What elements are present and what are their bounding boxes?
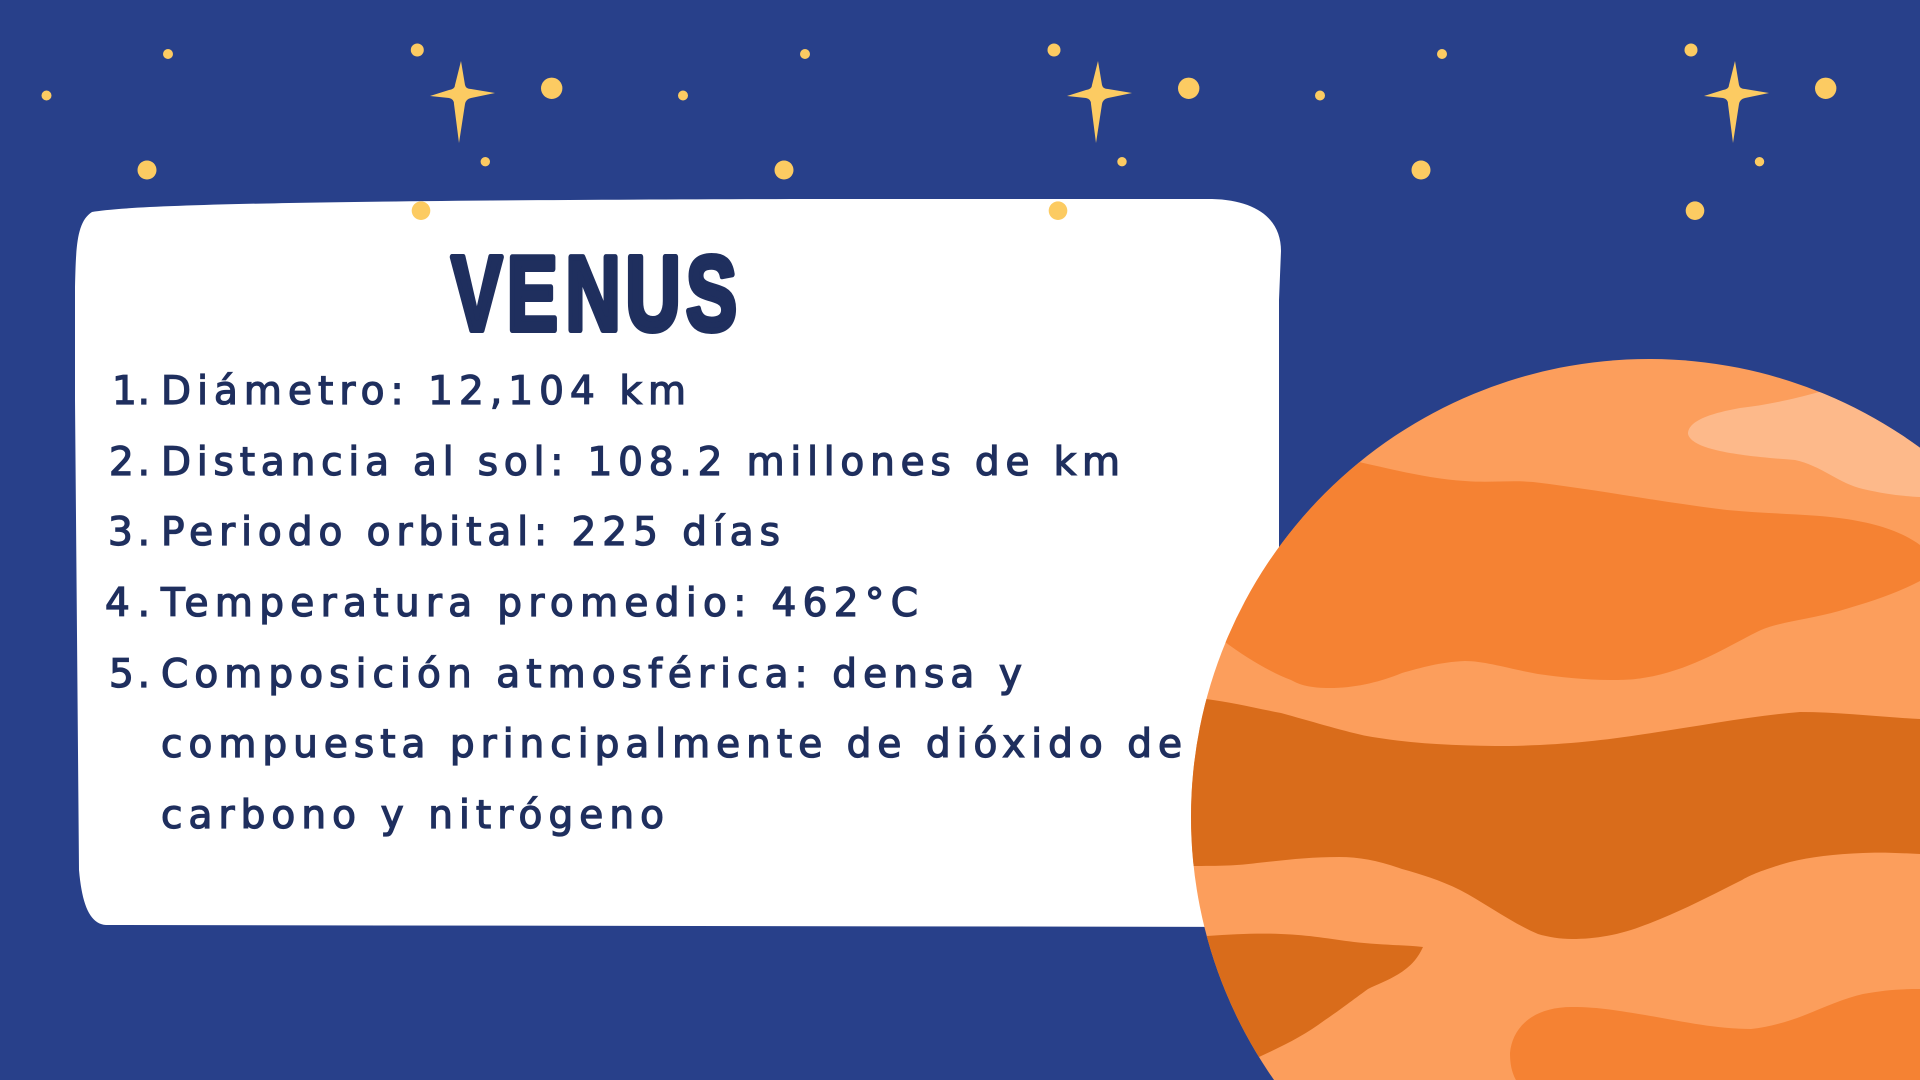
planet base bbox=[1180, 350, 1920, 1080]
fact 5: 5. bbox=[109, 652, 150, 697]
planet lower dark wedge bbox=[1206, 934, 1423, 1057]
planet upper band bbox=[1180, 462, 1920, 688]
fact 5 bbox=[109, 652, 1182, 838]
planet: Venus bbox=[1180, 350, 1920, 1080]
fact 5: compuesta principalmente de dióxido de bbox=[161, 722, 1182, 767]
fact 2: Distancia al sol: 108.2 millones de km bbox=[161, 440, 1120, 485]
star group 1 bbox=[42, 44, 562, 220]
fact 2: 2. bbox=[109, 440, 150, 485]
fact 5: carbono y nitrógeno bbox=[161, 793, 664, 838]
title: VENUS bbox=[451, 234, 737, 353]
fact 1: Diámetro: 12,104 km bbox=[161, 369, 686, 414]
panel: white info card bbox=[75, 199, 1281, 927]
star group 2 bbox=[678, 44, 1199, 220]
fact 5: Composición atmosférica: densa y bbox=[161, 652, 1022, 697]
planet highlight band bbox=[1688, 392, 1920, 497]
starfield bbox=[42, 44, 1836, 220]
planet middle dark band bbox=[1180, 697, 1920, 939]
fact 4: 4. bbox=[105, 581, 150, 626]
fact 1: 1. bbox=[112, 369, 150, 414]
fact 3: 3. bbox=[108, 510, 150, 555]
list of facts bbox=[105, 369, 1182, 838]
fact 3: Periodo orbital: 225 días bbox=[161, 510, 780, 555]
star group 3 bbox=[1315, 44, 1836, 220]
fact 4: Temperatura promedio: 462°C bbox=[160, 581, 918, 626]
planet lower orange patch bbox=[1510, 989, 1920, 1080]
